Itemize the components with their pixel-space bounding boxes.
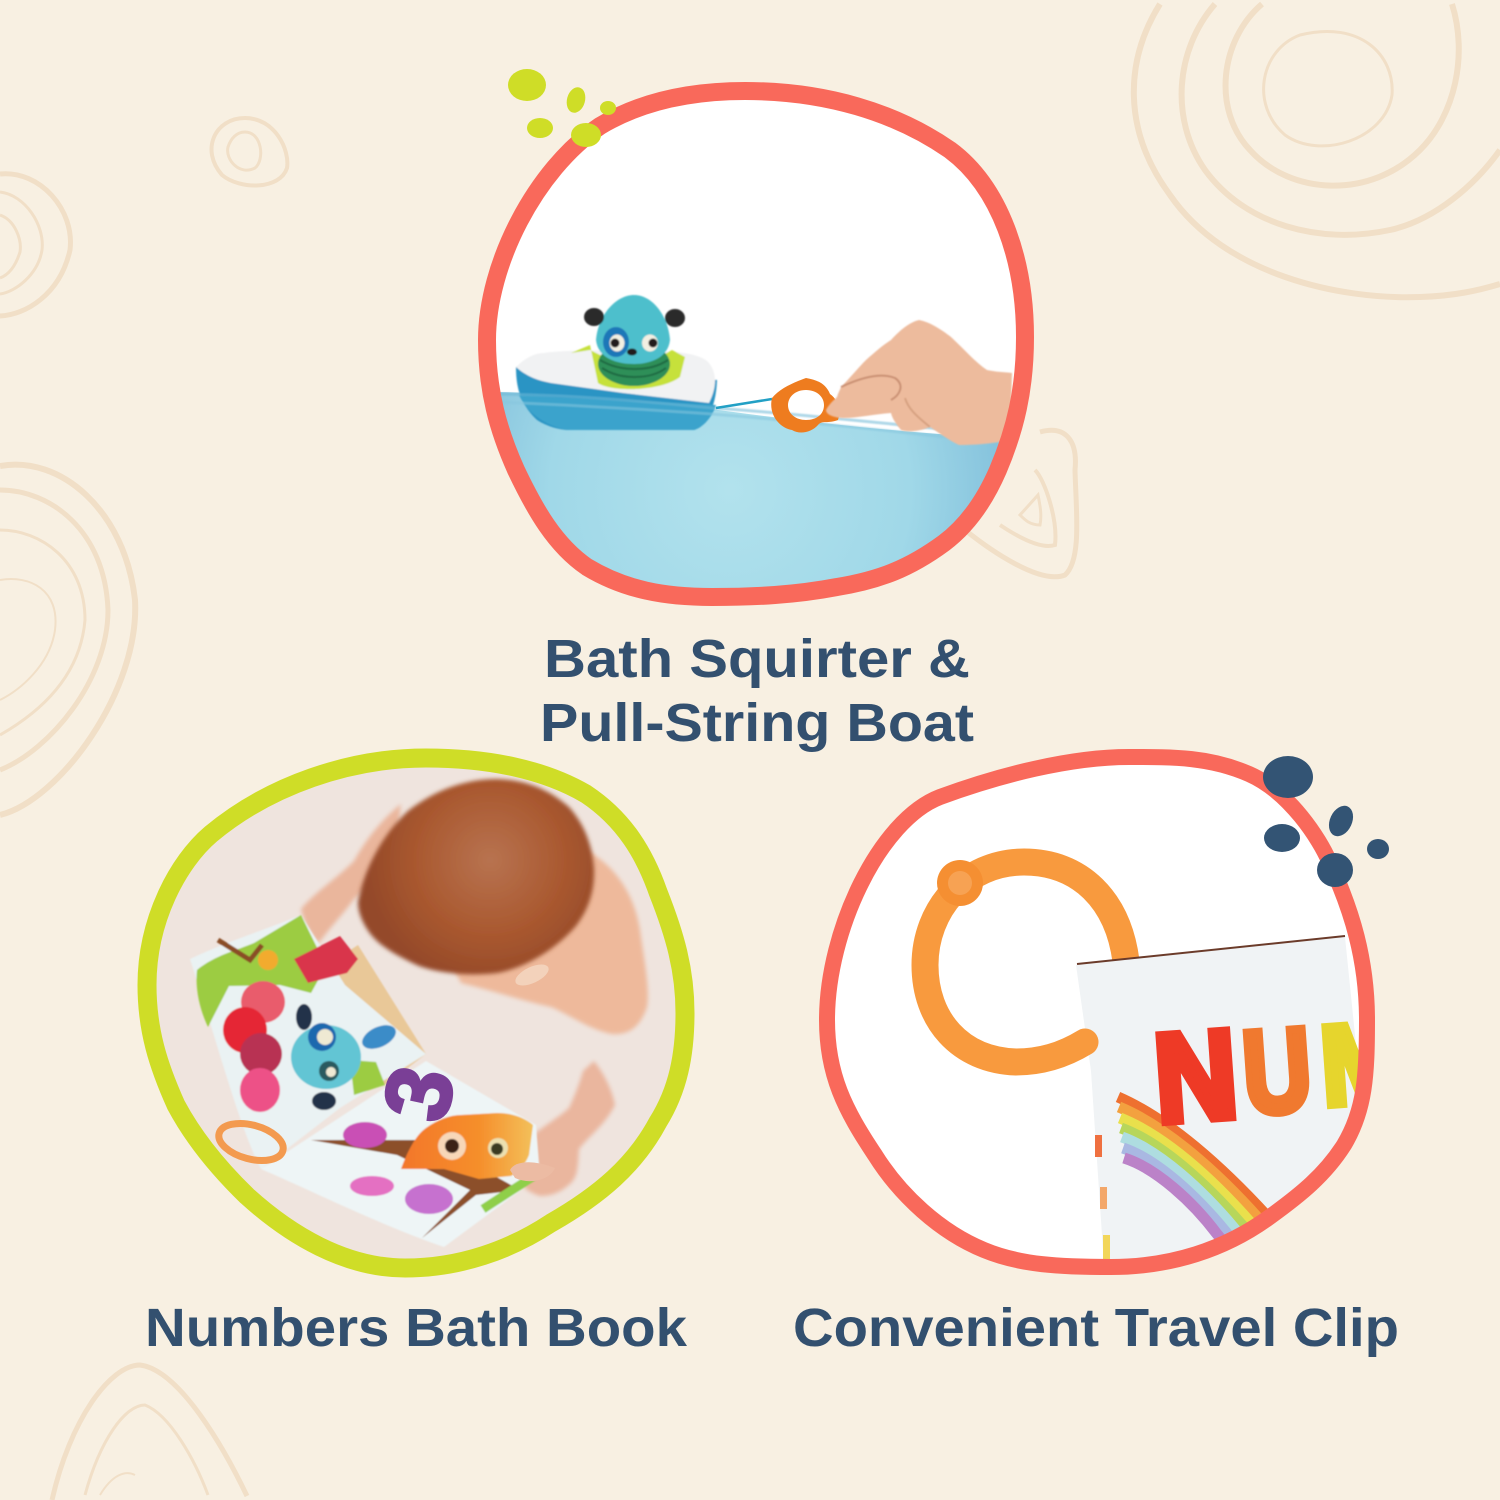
rainbow (1118, 1097, 1277, 1246)
baby ear (516, 964, 548, 986)
panel: numbers bath book photo (147, 758, 685, 1268)
heading: bath squirter and pull-string boat (540, 629, 974, 753)
book cover title: M (1316, 997, 1415, 1131)
heading: bath squirter and pull-string boat: Pull-String Boat (540, 693, 974, 753)
baby back and shoulder (454, 852, 650, 1036)
panel: bath squirter and boat photo (480, 91, 1030, 610)
book top edge (1077, 936, 1345, 964)
water (500, 392, 1000, 588)
book edge colour marks (1095, 1135, 1110, 1260)
panel: travel clip photo (827, 757, 1415, 1280)
book cover title (1155, 1022, 1358, 1126)
white book page (1076, 937, 1356, 1259)
pull string (716, 399, 772, 408)
water surface streaks (500, 392, 941, 437)
lime ring (147, 758, 685, 1268)
book clip ring (215, 1120, 287, 1164)
bath book (190, 915, 540, 1247)
purple number 3 on book: 3 (364, 1058, 475, 1129)
ring clasp (937, 860, 983, 906)
baby right arm (524, 1060, 617, 1198)
book cover title: U (1239, 1004, 1316, 1140)
heading: numbers bath book: Numbers Bath Book (145, 1298, 688, 1358)
coral ring (827, 757, 1367, 1267)
book cover title: N (1150, 1005, 1242, 1149)
heading: convenient travel clip: Convenient Travel Clip (793, 1298, 1399, 1358)
icon: navy splash dots (1263, 756, 1389, 887)
baby left arm (301, 804, 401, 943)
orange clip ring (925, 862, 1126, 1062)
book page covering the ring end (1112, 958, 1140, 974)
coral ring (487, 91, 1025, 597)
baby hair (358, 779, 594, 974)
boat (516, 295, 717, 430)
icon: lime splash dots (508, 69, 616, 147)
fingers on book (510, 1162, 544, 1182)
orange ring (771, 378, 839, 432)
hand (826, 320, 1012, 445)
heading: bath squirter and pull-string boat: Bath Squirter & (544, 629, 970, 689)
